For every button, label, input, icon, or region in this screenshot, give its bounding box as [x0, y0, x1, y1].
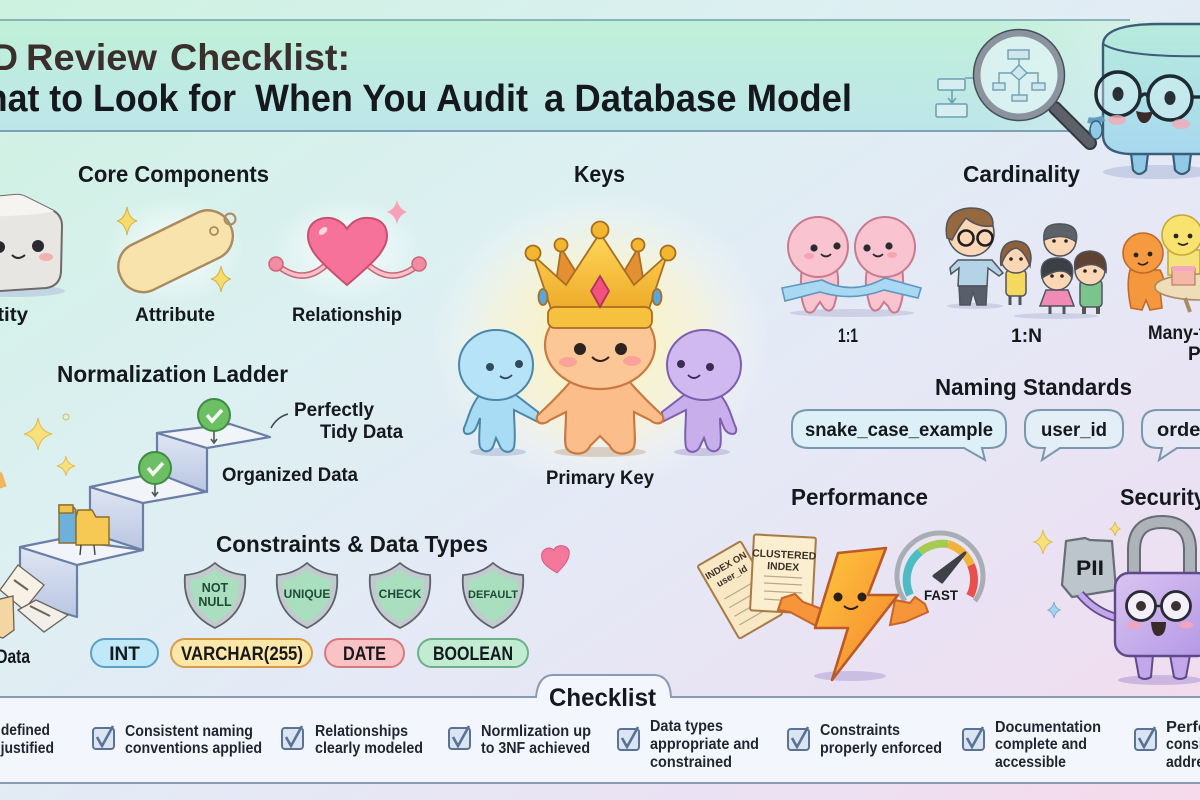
- heading: Performance: [791, 484, 928, 510]
- shield: default: DEFAULT: [468, 589, 518, 601]
- bubble: user_id: [1025, 410, 1123, 460]
- bubble: user_id: user_id: [1041, 420, 1107, 441]
- title banner: [0, 20, 1200, 131]
- label: Primary Key: Primary Key: [546, 468, 654, 489]
- icon: index document: INDEX ON: [704, 550, 749, 582]
- section: security: [1034, 484, 1200, 685]
- item: normalization: [449, 723, 591, 757]
- shield: not null: NOT: [202, 581, 229, 595]
- shield: unique: UNIQUE: [284, 587, 330, 601]
- icon: side flowchart boxes: [936, 78, 973, 117]
- pill: BOOLEAN: BOOLEAN: [433, 644, 513, 665]
- icon: clustered index document: INDEX: [767, 560, 799, 574]
- illustration: many to many party: [1123, 215, 1200, 312]
- magnifying glass: [974, 30, 1102, 143]
- bubble: snake_case_example: snake_case_example: [805, 420, 993, 441]
- item: data types: appropriate and: [650, 736, 759, 753]
- icon: speed gauge: FAST: [924, 587, 958, 603]
- title: a Database Model: [544, 78, 852, 120]
- label: 1:1: 1:1: [838, 326, 858, 347]
- section: performance: [697, 484, 983, 681]
- staircase: [20, 424, 270, 617]
- item: consistent naming: conventions applied: [125, 740, 262, 757]
- icon: PII badge: [1062, 538, 1116, 597]
- pill: VARCHAR: VARCHAR(255): [181, 644, 303, 665]
- title: Checklist:: [170, 37, 350, 78]
- heading: Normalization Ladder: [57, 361, 288, 387]
- bubble: order_id: [1142, 410, 1200, 460]
- mascot: database with magnifying glass: [974, 24, 1200, 179]
- figure: purple friend: [662, 330, 741, 456]
- pill: DATE: [325, 639, 404, 667]
- icon: lightning mascot: [778, 548, 928, 681]
- pill: INT: INT: [109, 644, 140, 665]
- icon: index document: user_id: [715, 563, 750, 590]
- icon: folders: [59, 505, 109, 555]
- label: Relationship: Relationship: [292, 305, 402, 326]
- shield: check: [370, 563, 430, 628]
- item: normalization: to 3NF achieved: [481, 740, 590, 757]
- label: 1:N: 1:N: [1011, 326, 1042, 347]
- figure: blue friend: [459, 330, 538, 456]
- pill: DATE: DATE: [343, 644, 386, 665]
- item: data types: constrained: [650, 754, 732, 771]
- item: relationships: Relationships: [315, 723, 408, 740]
- illustration: one to one: [782, 217, 921, 317]
- item: performance: [1135, 719, 1200, 771]
- icon: index document: [697, 541, 783, 639]
- icon: messy papers: [0, 565, 68, 638]
- illustration: one to many: [946, 208, 1106, 319]
- label: Attribute: Attribute: [135, 305, 215, 326]
- heading: Cardinality: [963, 161, 1080, 187]
- icon: PII badge: PII: [1076, 557, 1104, 580]
- section: core components: [0, 161, 426, 326]
- item: documentation: [963, 719, 1101, 771]
- icon: clustered index document: CLUSTERED: [752, 547, 817, 563]
- icon: small heart: [540, 544, 572, 575]
- pill: BOOLEAN: [418, 639, 528, 667]
- item: constraints: properly enforced: [820, 740, 942, 757]
- icon: lock mascot: [1080, 522, 1200, 685]
- shield: default: [463, 563, 523, 628]
- item: constraints: Constraints: [820, 722, 900, 739]
- figure: primary key with crown: [526, 222, 676, 457]
- item: constraints: [788, 722, 942, 757]
- glasses: [1096, 72, 1200, 120]
- item: consistent naming: [93, 723, 262, 757]
- title: When You Audit: [255, 78, 528, 120]
- icon: top check badge: [198, 399, 230, 443]
- icon: entity cube: [0, 195, 65, 297]
- shield: unique: [277, 563, 337, 628]
- pill: INT: [91, 639, 158, 667]
- item: data types: Data types: [650, 718, 723, 735]
- glow: [430, 190, 770, 490]
- item: documentation: accessible: [995, 754, 1066, 771]
- section: keys: [430, 161, 770, 490]
- item: relationships: [282, 723, 423, 757]
- section: normalization ladder: [0, 361, 403, 668]
- label: Perfectly Tidy Data: [271, 400, 403, 443]
- icon: attribute tag: [105, 195, 245, 305]
- label: Organized Data: Organized Data: [222, 465, 358, 486]
- section: constraints and data types: [91, 531, 572, 667]
- icon: crown: [526, 222, 676, 328]
- item: keys defined: [0, 722, 54, 757]
- sparkles: [0, 414, 75, 490]
- sparkles: [1034, 522, 1120, 618]
- title: [0, 37, 852, 120]
- heading: Checklist: Checklist: [549, 684, 657, 712]
- item: documentation: Documentation: [995, 719, 1101, 736]
- item: data types: [618, 718, 759, 771]
- label: Perfectly Tidy Data: Tidy Data: [320, 422, 403, 443]
- icon: relationship heart: [269, 198, 426, 302]
- heading: Core Components: [78, 161, 269, 187]
- shield: not null: [185, 563, 245, 628]
- pill: VARCHAR: [171, 639, 312, 667]
- heading: Naming Standards: [935, 374, 1132, 400]
- shield: not null: NULL: [198, 595, 232, 609]
- bubble: snake_case_example: [792, 410, 1006, 460]
- title: Review: [26, 37, 157, 78]
- icon: lower check badge: [139, 452, 171, 496]
- section: naming standards: [792, 374, 1200, 460]
- panel: checklist: [0, 675, 1200, 783]
- label: Perfectly Tidy Data: Perfectly: [294, 400, 374, 421]
- item: relationships: clearly modeled: [315, 740, 423, 757]
- heading: Constraints & Data Types: [216, 531, 488, 557]
- shield: check: CHECK: [379, 587, 422, 601]
- icon: clustered index document: [750, 534, 817, 614]
- heading: Keys: [574, 161, 625, 187]
- item: documentation: complete and: [995, 736, 1087, 753]
- section: cardinality: [782, 161, 1200, 365]
- item: consistent naming: Consistent naming: [125, 723, 253, 740]
- item: normalization: Normlization up: [481, 723, 591, 740]
- icon: speed gauge: [897, 533, 983, 603]
